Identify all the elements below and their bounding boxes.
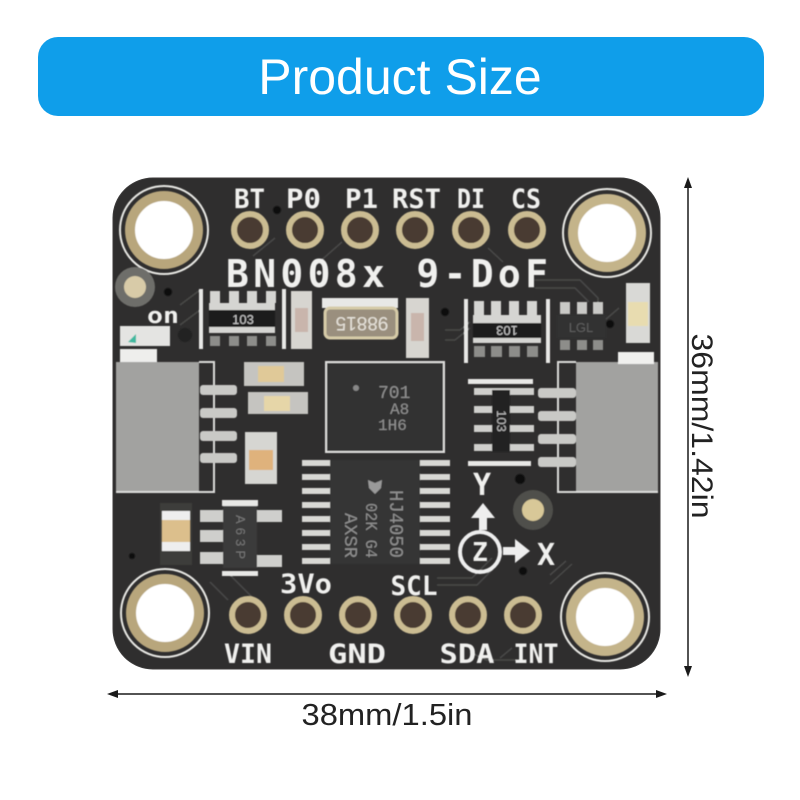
top pin labels: BT (234, 184, 265, 215)
top pin labels: CS (511, 184, 541, 215)
LED right (626, 283, 650, 343)
bottom pin labels: GND (328, 639, 386, 670)
board name: BN008x 9-DoF (226, 252, 548, 296)
width dimension arrow (107, 690, 667, 698)
fiducial right (513, 490, 553, 530)
crystal (322, 298, 398, 338)
height dimension arrow (684, 177, 692, 677)
sensor chip: A8 (390, 401, 409, 419)
bottom header pads (232, 599, 539, 631)
on label and LED: on (147, 304, 179, 329)
axis marker: Y (473, 468, 491, 503)
small resistor (291, 291, 312, 349)
right connector (538, 352, 658, 492)
resistor network right (464, 299, 550, 363)
axis marker: Z (472, 538, 488, 568)
mounting hole: top left (120, 186, 208, 274)
mounting hole: bottom left (121, 569, 209, 657)
resistor network right: 103 (496, 323, 518, 338)
small resistor right (406, 298, 429, 358)
on label and LED (120, 304, 179, 362)
top pin labels: P0 (286, 184, 321, 215)
transistor package (557, 302, 606, 350)
mounting hole: bottom right (561, 573, 649, 661)
bottom pin labels (224, 569, 558, 670)
resistor network left: 103 (232, 312, 254, 327)
left connector (116, 362, 237, 492)
axis marker: X (537, 538, 555, 573)
axis marker (460, 468, 555, 573)
voltage regulator (200, 500, 282, 576)
bottom pin labels: SCL (390, 571, 438, 602)
circuit board (113, 178, 660, 670)
bottom pin labels: VIN (224, 639, 272, 670)
title banner: Product Size (258, 49, 542, 105)
driver chip: AXSR (339, 513, 359, 558)
title banner (38, 37, 764, 116)
mounting hole: top right (563, 189, 651, 277)
sensor chip: 701 (378, 384, 410, 404)
driver chip: HJ4050 (384, 490, 406, 558)
resistor network center right: 103 (494, 410, 509, 432)
voltage regulator: A63P (233, 515, 248, 559)
transistor package: LGL (569, 320, 593, 335)
striped capacitor (160, 503, 192, 565)
bottom pin labels: 3Vo (280, 569, 332, 600)
vias (129, 206, 614, 575)
top header pads (234, 214, 543, 246)
bottom pin labels: SDA (440, 639, 494, 670)
bottom pin labels: INT (514, 639, 558, 670)
resistor network left (199, 289, 286, 349)
fiducial top left (115, 267, 155, 307)
resistor network center right (468, 379, 534, 466)
top pin labels (234, 184, 541, 215)
height label: 36mm/1.42in (685, 333, 718, 519)
sensor chip: 1H6 (378, 417, 407, 435)
sensor chip (326, 362, 444, 452)
top pin labels: RST (392, 184, 441, 215)
top pin labels: DI (457, 184, 485, 215)
driver chip (302, 460, 450, 564)
width label: 38mm/1.5in (302, 697, 472, 732)
capacitors (244, 362, 308, 484)
top pin labels: P1 (345, 184, 378, 215)
traces (180, 238, 619, 660)
driver chip: 02K G4 (360, 503, 379, 558)
crystal: 98815 (336, 312, 388, 333)
